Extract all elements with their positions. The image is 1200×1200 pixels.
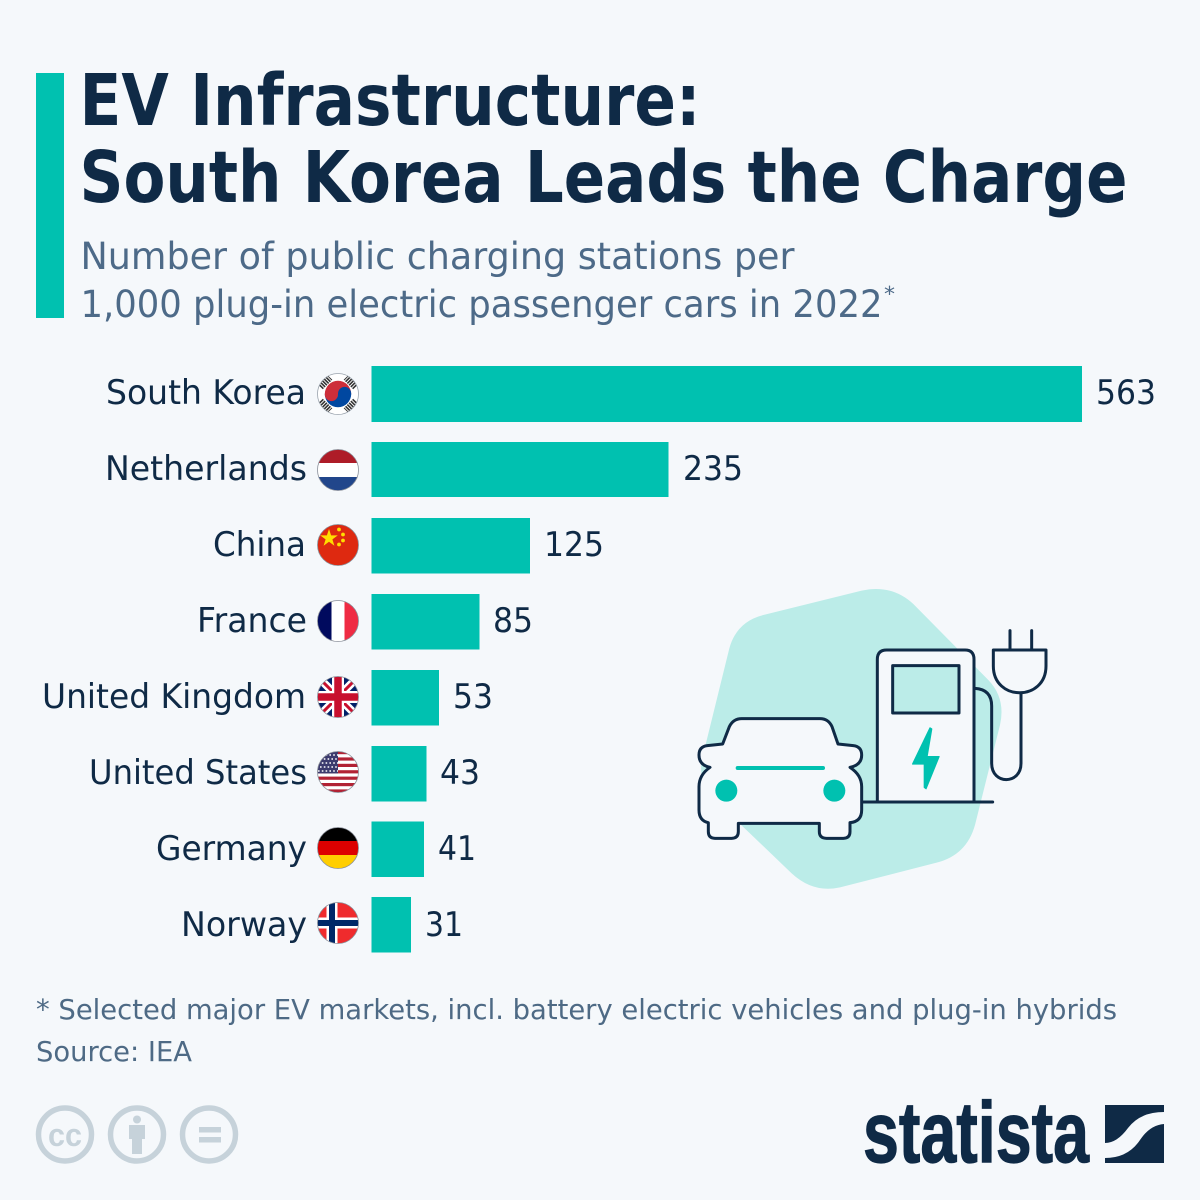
statista logo [863, 1085, 1164, 1181]
icon: flag United States [317, 751, 359, 793]
icon: creative commons: cc [48, 1117, 82, 1153]
icon: flag Germany [317, 827, 359, 869]
country labels [42, 373, 307, 945]
icon: creative commons [38, 1108, 92, 1161]
charging pump [863, 631, 1046, 802]
icon: no derivatives [182, 1108, 236, 1161]
country labels: Norway [181, 905, 307, 945]
country labels: China [213, 525, 306, 565]
bar values: 563 [1096, 373, 1156, 413]
title: EV Infrastructure: [80, 59, 700, 142]
footnote and source [36, 993, 1117, 1068]
icon: flag France [317, 600, 359, 642]
icon: flag South Korea [317, 373, 359, 415]
logo mark [1105, 1105, 1164, 1163]
icon: attribution [110, 1108, 164, 1161]
country labels: Netherlands [105, 449, 307, 489]
footnote and source: * Selected major EV markets, incl. battery electric vehicles and plug-in hybrids [36, 993, 1117, 1026]
illustration: EV at charging station [699, 589, 1046, 889]
bar values: 125 [544, 525, 604, 565]
bar values: 43 [440, 753, 480, 793]
country labels: United States [89, 753, 307, 793]
icon: flag Netherlands [317, 449, 359, 491]
country labels: South Korea [106, 373, 306, 413]
subtitle [80, 235, 895, 326]
bar values: 53 [453, 677, 493, 717]
bar chart [42, 366, 1156, 952]
background hexagon blob [701, 589, 1002, 889]
icon: flag Norway [317, 902, 359, 944]
bar values: 31 [425, 905, 463, 945]
title [80, 59, 1128, 219]
lightning bolt [913, 728, 939, 789]
country labels: Germany [156, 829, 307, 869]
bar values: 41 [438, 829, 476, 869]
bar values [425, 373, 1156, 945]
icon: flag United Kingdom [317, 676, 359, 718]
subtitle: * [884, 282, 895, 306]
wordmark: statista [863, 1085, 1090, 1181]
license icons [38, 1108, 236, 1161]
bar values: 235 [683, 449, 743, 489]
subtitle: Number of public charging stations per [80, 235, 795, 278]
car details [715, 766, 845, 802]
title accent bar [36, 73, 64, 318]
subtitle: 1,000 plug-in electric passenger cars in 2022 [80, 283, 882, 326]
bars [372, 366, 1082, 952]
footnote and source: Source: IEA [36, 1035, 192, 1068]
icon: flag China [317, 524, 359, 566]
country labels: France [197, 601, 307, 641]
country labels: United Kingdom [42, 677, 306, 717]
car [699, 719, 862, 838]
bar values: 85 [493, 601, 533, 641]
